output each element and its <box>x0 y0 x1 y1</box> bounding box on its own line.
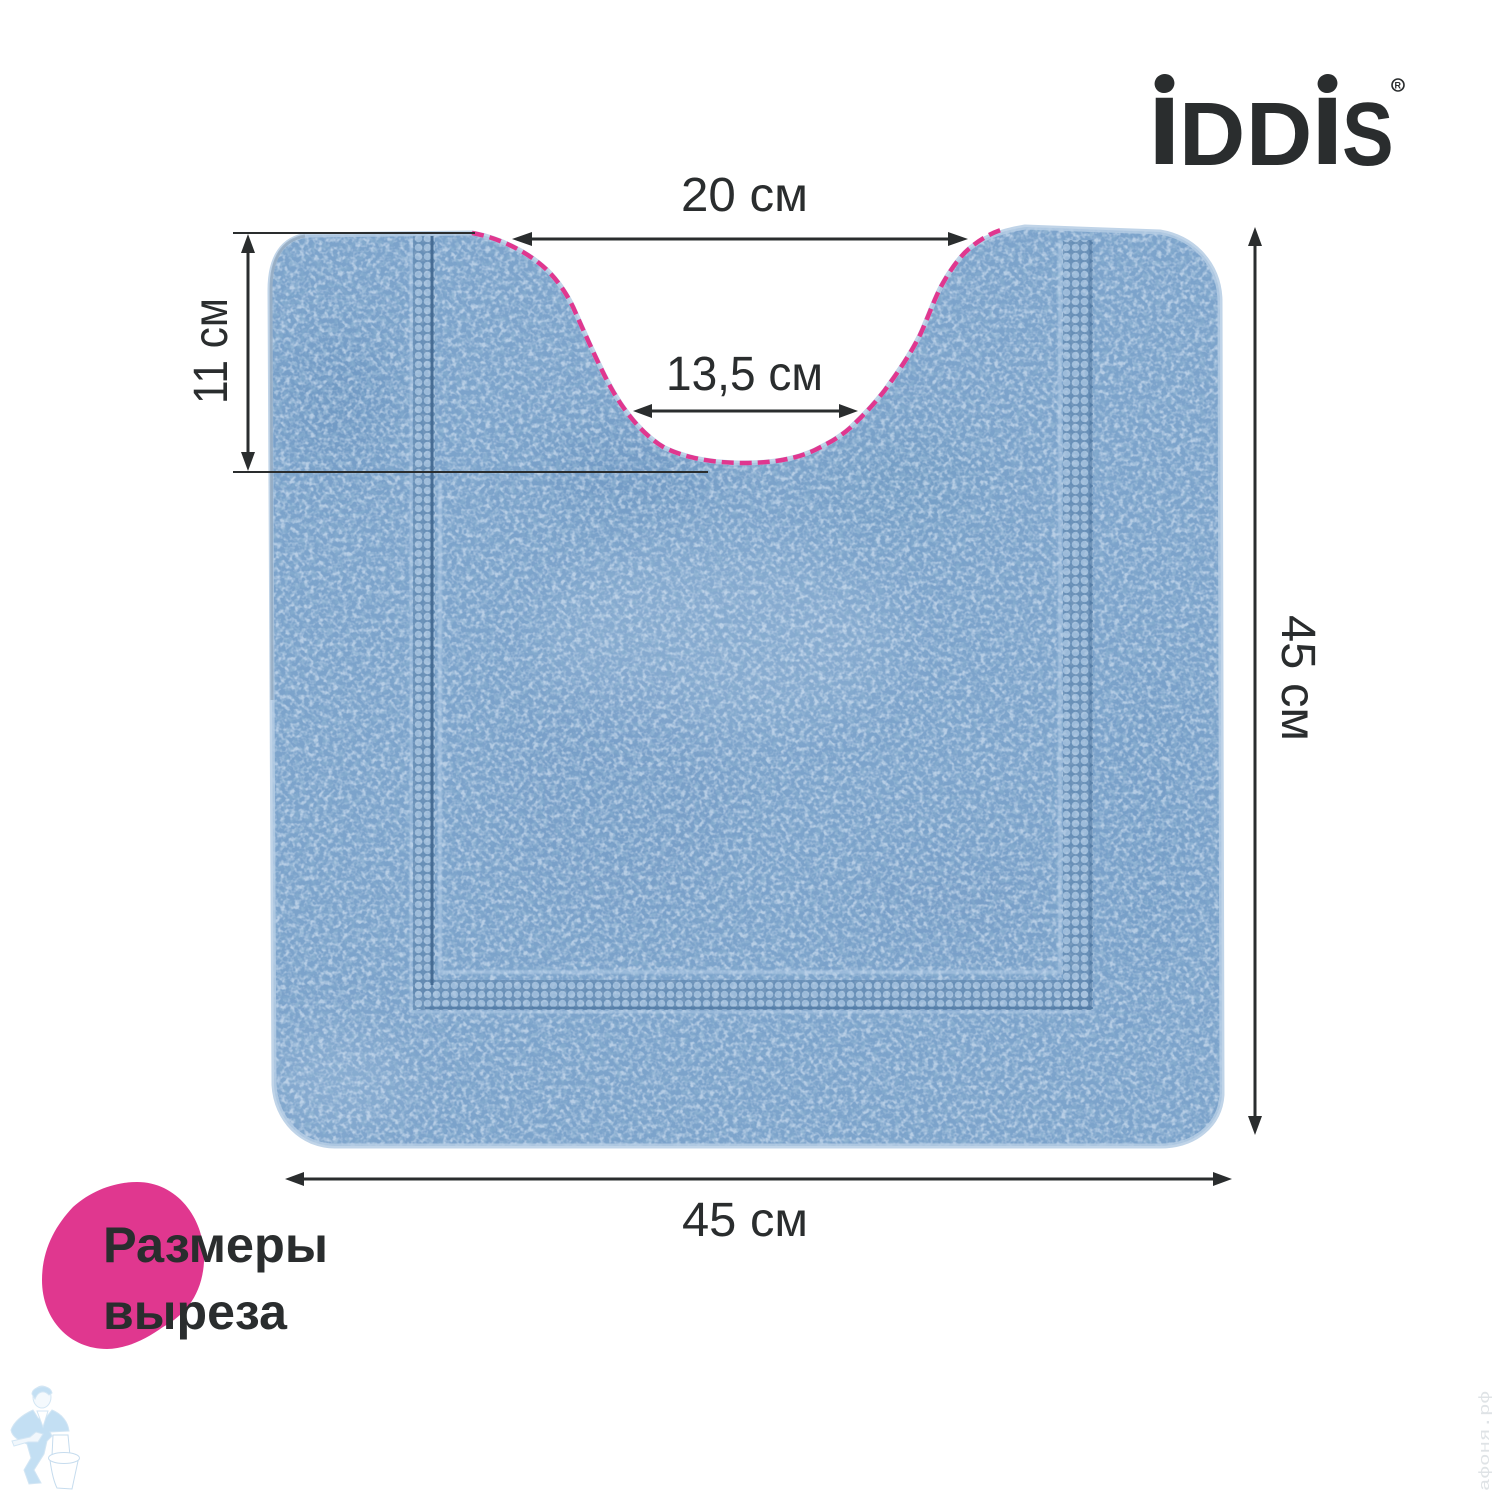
tonal shading <box>290 356 877 1118</box>
hair <box>32 1387 52 1399</box>
dimension: bottom 45 cm: 45 см <box>682 1194 808 1247</box>
logo: iDDiS: i <box>1147 52 1182 191</box>
mat pile texture <box>260 220 1230 1155</box>
shirt <box>37 1411 48 1427</box>
logo: iDDiS <box>1154 74 1405 166</box>
dimension: 13,5 cm: 13,5 см <box>666 348 823 401</box>
dimension: 11 cm: 11 см <box>185 298 238 404</box>
head <box>33 1386 51 1408</box>
logo: iDDiS: R <box>1394 80 1402 90</box>
wrench <box>12 1432 43 1446</box>
logo: iDDiS: S <box>1342 84 1394 184</box>
watermark: vertical site name: афоня.рф <box>1477 1391 1494 1491</box>
logo: iDDiS: D <box>1246 85 1312 185</box>
mat shaded left edge <box>271 236 305 700</box>
plumber body <box>11 1410 69 1484</box>
dimension: 11 cm <box>185 233 708 472</box>
stitched border band <box>411 235 1095 1012</box>
bath mat with toilet cut-out <box>260 220 1230 1155</box>
dimension: 13,5 cm <box>633 348 858 418</box>
toilet <box>48 1435 80 1489</box>
logo: iDDiS: D <box>1179 85 1245 185</box>
dimension: right 45 cm: 45 см <box>1271 615 1324 741</box>
heading: cut-out dimensions: Размеры <box>103 1217 328 1273</box>
heading: cut-out dimensions <box>103 1217 328 1340</box>
logo: iDDiS: i <box>1310 52 1345 191</box>
dimension: bottom 45 cm <box>285 1172 1232 1247</box>
icon: plumber with toilet <box>11 1386 80 1489</box>
heading: cut-out dimensions: выреза <box>103 1284 288 1340</box>
pink blob <box>42 1182 204 1349</box>
dimension: right 45 cm <box>1248 227 1324 1135</box>
mat light edge <box>270 227 1222 1146</box>
dimension: 20 cm: 20 см <box>681 169 808 222</box>
dimension: 20 cm <box>512 169 968 246</box>
dashed cut-out outline <box>472 229 1004 463</box>
